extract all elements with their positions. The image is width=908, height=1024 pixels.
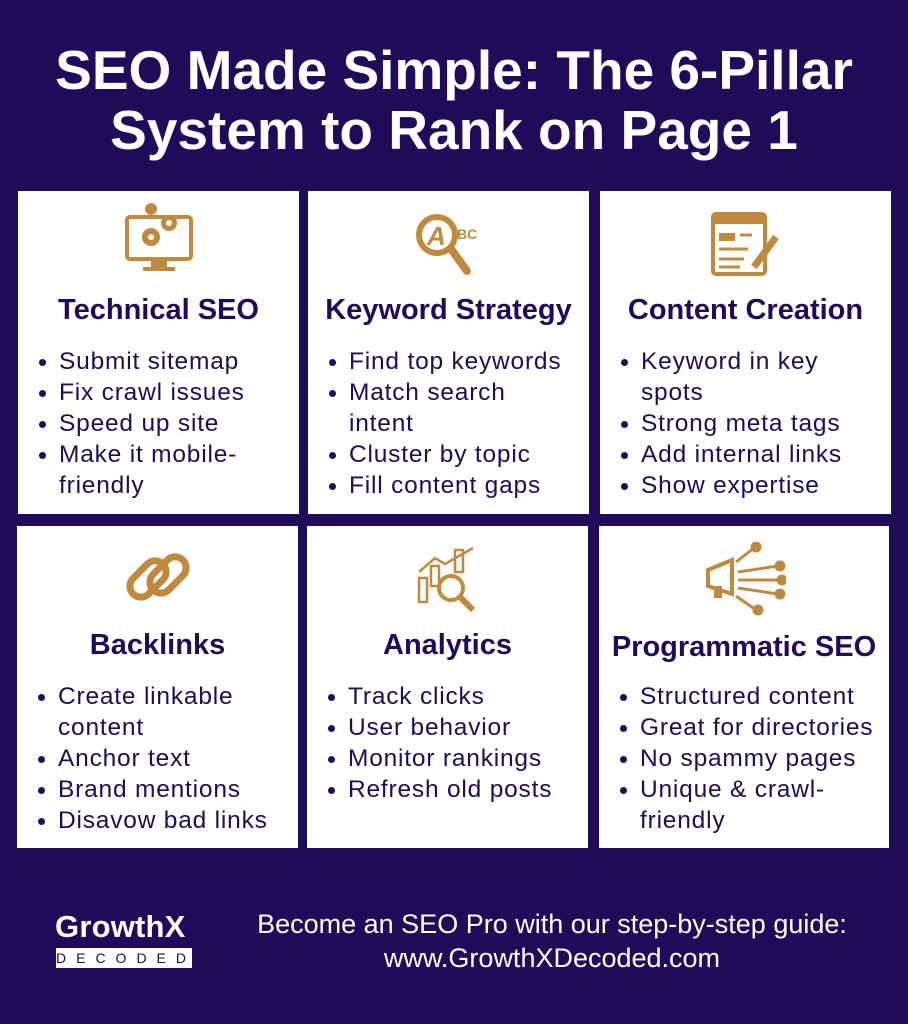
bullet list: Match search	[349, 379, 506, 406]
bullet list: Monitor rankings	[348, 745, 542, 772]
footer text: Become an SEO Pro with our step-by-step guide:	[257, 909, 847, 939]
bullet list: Create linkable	[58, 683, 233, 710]
icon: magnifier ABC: BC	[456, 226, 477, 242]
icon: document pencil	[711, 212, 779, 276]
panel: content creation	[600, 191, 891, 514]
bullet list	[329, 348, 561, 499]
icon: chain link	[126, 553, 190, 601]
logo: GrowthX	[55, 909, 186, 944]
bullet list: No spammy pages	[640, 745, 856, 772]
title	[55, 39, 853, 161]
bullet list	[38, 683, 268, 834]
logo: DECODED	[56, 950, 196, 966]
bullet list	[620, 683, 873, 834]
icon: chart magnifier	[418, 546, 476, 612]
bullet list: Fill content gaps	[349, 472, 541, 499]
icon: megaphone circuit	[706, 542, 786, 616]
icon: magnifier ABC: A	[426, 221, 445, 251]
bullet list: intent	[349, 410, 414, 437]
panel: keyword strategy	[308, 191, 589, 514]
panel: technical seo	[18, 191, 299, 514]
icon: monitor gears	[125, 203, 193, 271]
bullet list: Submit sitemap	[59, 348, 239, 375]
bullet list	[328, 683, 552, 803]
bullet list: Make it mobile-	[59, 441, 237, 468]
bullet list: Unique & crawl-	[640, 776, 825, 803]
bullet list: friendly	[59, 472, 144, 499]
footer text	[257, 909, 847, 973]
bullet list: Fix crawl issues	[59, 379, 245, 406]
bullet list: Find top keywords	[349, 348, 561, 375]
icon: magnifier ABC	[416, 214, 477, 275]
heading: Content Creation	[628, 294, 863, 326]
bullet list: User behavior	[348, 714, 511, 741]
bullet list: Cluster by topic	[349, 441, 531, 468]
bullet list: Add internal links	[641, 441, 842, 468]
bullet list: Structured content	[640, 683, 855, 710]
bullet list: spots	[641, 379, 704, 406]
bullet list: Disavow bad links	[58, 807, 268, 834]
bullet list: Great for directories	[640, 714, 873, 741]
bullet list: Anchor text	[58, 745, 191, 772]
bullet list: Keyword in key	[641, 348, 818, 375]
bullet list: Speed up site	[59, 410, 219, 437]
footer text: www.GrowthXDecoded.com	[384, 943, 720, 973]
heading: Backlinks	[90, 629, 225, 661]
title: SEO Made Simple: The 6-Pillar	[55, 39, 853, 101]
bullet list	[39, 348, 245, 499]
bullet list: Show expertise	[641, 472, 820, 499]
panel: backlinks	[17, 526, 298, 848]
bullet list: Refresh old posts	[348, 776, 552, 803]
heading: Technical SEO	[58, 294, 259, 326]
panel: programmatic seo	[599, 526, 889, 848]
logo	[55, 909, 196, 968]
bullet list	[621, 348, 842, 499]
bullet list: friendly	[640, 807, 725, 834]
bullet list: Strong meta tags	[641, 410, 840, 437]
heading: Analytics	[383, 629, 512, 661]
heading: Programmatic SEO	[612, 631, 876, 663]
bullet list: Track clicks	[348, 683, 485, 710]
bullet list: content	[58, 714, 144, 741]
heading: Keyword Strategy	[325, 294, 572, 326]
title: System to Rank on Page 1	[110, 99, 798, 161]
panel: analytics	[307, 526, 588, 848]
bullet list: Brand mentions	[58, 776, 241, 803]
